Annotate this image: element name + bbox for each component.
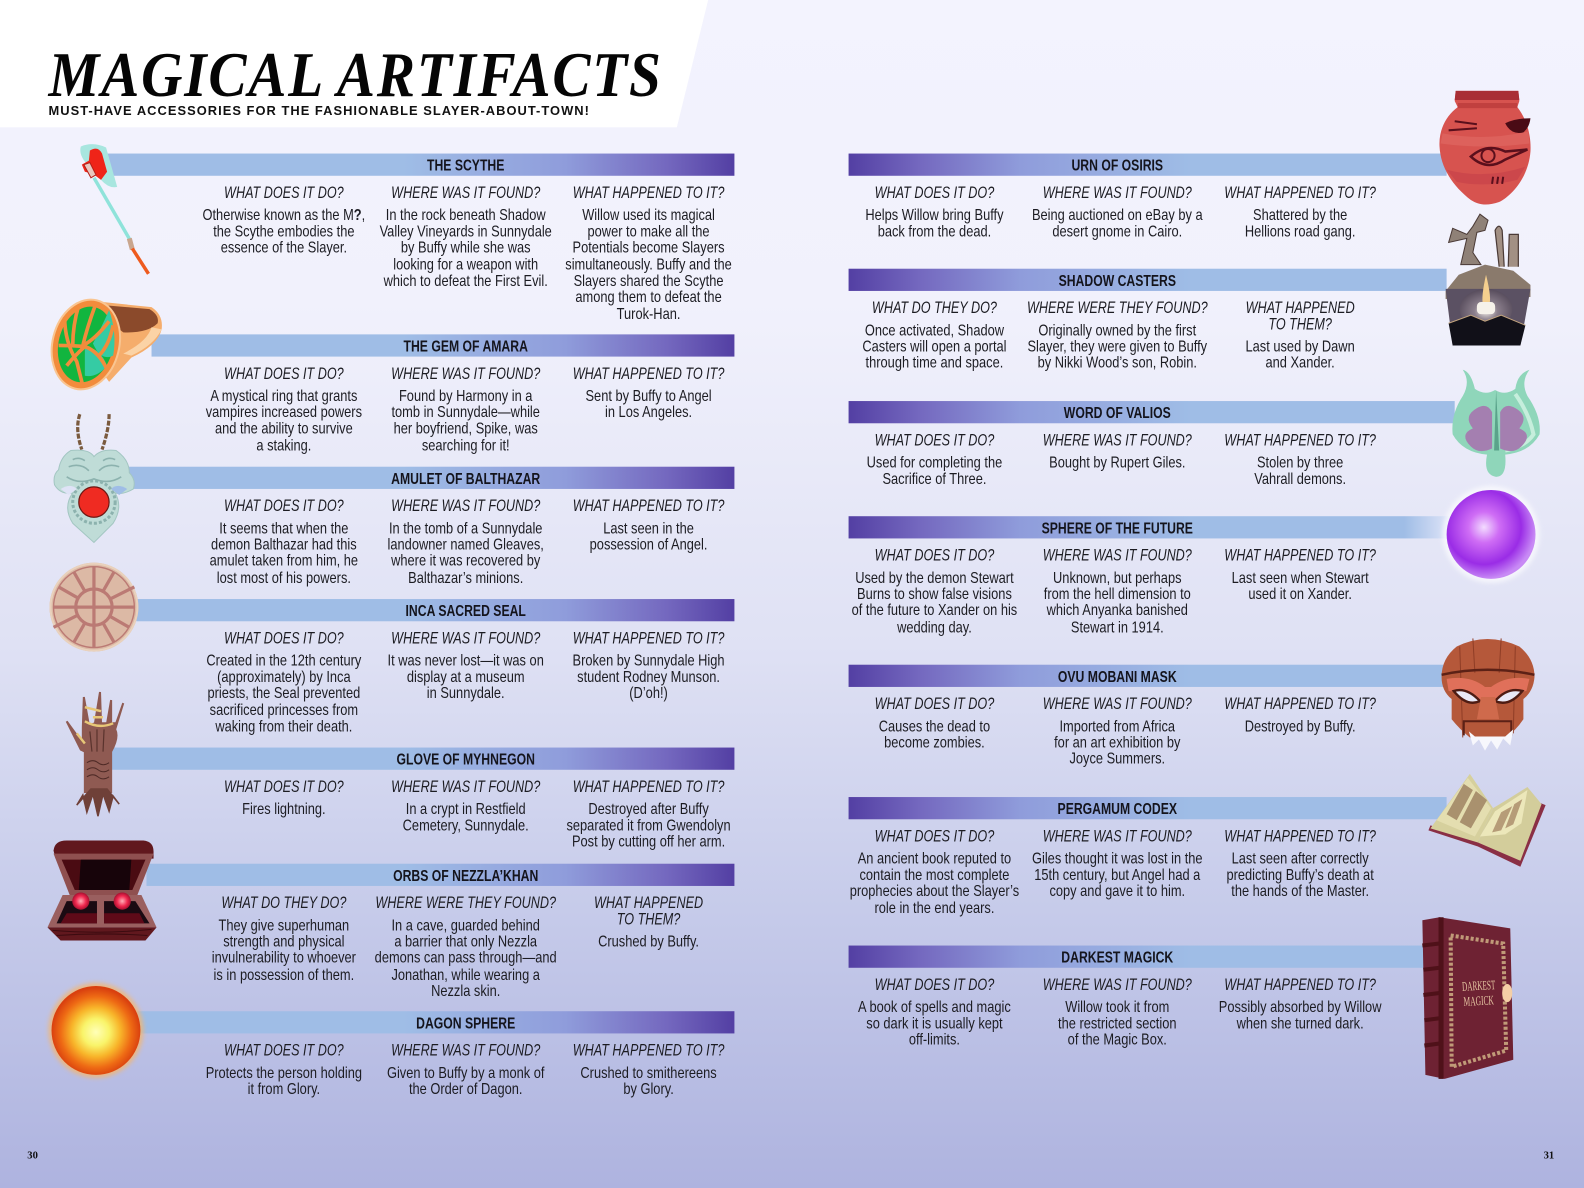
column: what does it do: priests, the Seal prevented — [207, 685, 360, 702]
column: what happened: Last used by Dawn — [1246, 339, 1355, 356]
panel: the gem of amara — [152, 334, 734, 454]
icon: dagon sphere — [48, 983, 143, 1078]
column: what happened: predicting Buffy’s death at — [1226, 867, 1374, 884]
panel: ovu mobani mask — [838, 665, 1455, 771]
column: what happened: Destroyed by Buffy. — [1245, 718, 1356, 735]
panel: inca sacred seal — [136, 599, 734, 735]
column: what happened: by Glory. — [623, 1081, 674, 1098]
icon: ovu mobani mask — [1442, 638, 1534, 751]
column: where found: her boyfriend, Spike, was — [394, 421, 538, 438]
icon: scythe — [80, 144, 148, 274]
panel: urn of osiris — [848, 154, 1447, 241]
column: where found — [1014, 976, 1221, 1049]
column: where found: It was never lost—it was on — [388, 652, 544, 670]
column: what happened: the hands of the Master. — [1231, 883, 1369, 900]
column: what happened: WHAT HAPPENED — [594, 894, 703, 912]
column: where found — [380, 183, 552, 290]
band: dagon — [136, 1011, 734, 1033]
column: where found: copy and gave it to him. — [1049, 883, 1185, 900]
column: where found: Cemetery, Sunnydale. — [403, 817, 529, 835]
icon: shadow casters — [1446, 214, 1530, 345]
column: where found: WHERE WAS IT FOUND? — [391, 183, 540, 202]
column: what happened: WHAT HAPPENED TO IT? — [1224, 546, 1376, 564]
column: what does it do: An ancient book reputed to — [858, 850, 1011, 868]
column: where found: WHERE WAS IT FOUND? — [391, 364, 540, 382]
column: where found: Unknown, but perhaps — [1053, 570, 1182, 587]
column: what does it do: amulet taken from him, he — [210, 553, 358, 570]
column: what does it do: WHAT DOES IT DO? — [224, 777, 344, 796]
icon: darkest magick book — [1422, 917, 1513, 1079]
column: what do they do — [212, 894, 356, 984]
column: where found: Found by Harmony in a — [399, 388, 532, 405]
column: where found: WHERE WERE THEY FOUND? — [1027, 299, 1208, 317]
band: mask — [849, 665, 1447, 687]
column: where found: which Anyanka banished — [1047, 602, 1188, 620]
band: urn — [849, 154, 1447, 176]
column: what happened: separated it from Gwendolyn — [566, 817, 731, 835]
band: gem of amara — [152, 334, 734, 357]
band: shadow casters — [849, 269, 1447, 291]
column: what happened: Shattered by the — [1253, 207, 1347, 224]
column: what does it do: of the future to Xander on his — [852, 602, 1017, 620]
column: what happened: Possibly absorbed by Willow — [1219, 999, 1381, 1016]
band: glove — [106, 748, 734, 770]
column: where found: searching for it! — [422, 437, 510, 454]
column: what does it do: off-limits. — [909, 1032, 960, 1049]
title banner — [0, 0, 708, 127]
column: what does it do: Sacrifice of Three. — [882, 471, 986, 488]
column: where found — [1014, 696, 1221, 768]
column: what happened — [1197, 976, 1404, 1033]
column: what does it do: WHAT DOES IT DO? — [875, 431, 994, 449]
column: what does it do — [831, 976, 1038, 1049]
column: what does it do: demon Balthazar had this — [211, 537, 357, 554]
icon: sphere of the future — [1443, 486, 1540, 583]
band: valios — [849, 401, 1455, 423]
heading: ORBS OF NEZZLA’KHAN — [393, 867, 538, 884]
column: what happened: WHAT HAPPENED TO IT? — [573, 777, 724, 796]
column: where found: In a cave, guarded behind — [391, 917, 540, 934]
column: what does it do: WHAT DOES IT DO? — [224, 629, 344, 647]
page number: 30: 30 — [27, 1151, 38, 1162]
column: where found: Imported from Africa — [1059, 718, 1175, 735]
column: what happened: Willow used its magical — [582, 207, 715, 224]
panel: orbs of nezzla'khan — [146, 864, 734, 1000]
column: what do they do: invulnerability to whoever — [212, 950, 356, 967]
column: what does it do — [206, 364, 362, 454]
column: where found: from the hell dimension to — [1044, 586, 1191, 603]
column: what does it do: Protects the person holding — [206, 1065, 362, 1082]
column: what happened: WHAT HAPPENED — [1246, 299, 1355, 317]
column: where found: In a crypt in Restfield — [406, 801, 526, 818]
column: where found — [387, 1041, 544, 1098]
column: what does it do: so dark it is usually kept — [866, 1015, 1003, 1033]
band: sphere — [849, 516, 1450, 538]
column: what does it do: A book of spells and magic — [858, 999, 1011, 1016]
panel: darkest magick — [838, 946, 1455, 1052]
column: where found: WHERE WAS IT FOUND? — [1043, 695, 1192, 713]
column: what happened — [565, 183, 732, 323]
column: what does it do: Created in the 12th century — [206, 652, 361, 670]
heading: GLOVE OF MYHNEGON — [396, 751, 535, 768]
column: what does it do — [224, 777, 344, 818]
column: what happened: TO THEM? — [617, 910, 680, 928]
heading: SHADOW CASTERS — [1059, 272, 1176, 289]
column: what happened: Slayers shared the Scythe — [574, 273, 723, 290]
column: what does it do: Helps Willow bring Buffy — [865, 207, 1004, 224]
column: what happened — [1224, 183, 1376, 241]
column: what does it do: the Scythe embodies the — [213, 223, 355, 241]
column: what happened — [566, 777, 731, 851]
icon: darkest magick book: DARKEST — [1462, 977, 1496, 994]
column: where found: tomb in Sunnydale—while — [391, 404, 540, 421]
column: what happened: WHAT HAPPENED TO IT? — [1224, 183, 1376, 202]
column: what does it do: a staking. — [256, 437, 311, 454]
column: where found — [388, 497, 544, 587]
heading: INCA SACRED SEAL — [406, 603, 526, 620]
column: what happened: Potentials become Slayers — [573, 240, 725, 257]
panel: shadow casters — [848, 268, 1447, 372]
column: what happened: WHAT HAPPENED TO IT? — [573, 1041, 724, 1059]
column: where found: display at a museum — [407, 669, 525, 686]
column: what does it do: WHAT DOES IT DO? — [224, 1041, 344, 1059]
band: the scythe — [101, 154, 734, 176]
column: what happened: Stolen by three — [1257, 454, 1343, 472]
column: where found: the Order of Dagon. — [409, 1081, 522, 1098]
band: seal — [136, 599, 734, 621]
band: orbs — [146, 864, 734, 886]
column: where found — [388, 629, 544, 702]
heading: THE SCYTHE — [427, 157, 504, 174]
heading: OVU MOBANI MASK — [1058, 668, 1177, 685]
column: where found — [375, 894, 557, 1000]
column: where found: WHERE WAS IT FOUND? — [1043, 827, 1192, 845]
heading: THE GEM OF AMARA — [404, 338, 528, 355]
panel: pergamum codex — [838, 797, 1455, 920]
column: what does it do: Causes the dead to — [879, 718, 990, 735]
icon: pergamum codex — [1428, 774, 1546, 867]
column: what does it do: WHAT DOES IT DO? — [224, 364, 344, 382]
column: what do they do: WHAT DO THEY DO? — [872, 299, 997, 317]
column: where found: WHERE WAS IT FOUND? — [1043, 183, 1192, 202]
column: what does it do: and the ability to survive — [215, 421, 353, 438]
column: where found: Jonathan, while wearing a — [391, 966, 540, 984]
column: what do they do: strength and physical — [223, 934, 345, 951]
column: where found: WHERE WAS IT FOUND? — [391, 1041, 540, 1059]
column: what does it do: it from Glory. — [248, 1081, 320, 1098]
band: codex — [849, 797, 1447, 819]
column: what do they do: WHAT DO THEY DO? — [221, 894, 346, 912]
page number: 31: 31 — [1544, 1151, 1554, 1162]
column: what does it do — [210, 497, 358, 587]
column: what does it do: WHAT DOES IT DO? — [875, 827, 994, 845]
column: what happened — [573, 497, 724, 554]
column: where found — [1027, 299, 1208, 372]
column: what does it do — [831, 696, 1038, 752]
column: where found: Valley Vineyards in Sunnydale — [380, 223, 552, 241]
column: what does it do: WHAT DOES IT DO? — [875, 695, 994, 713]
column: where found: Stewart in 1914. — [1071, 619, 1164, 636]
column: where found — [1014, 828, 1221, 901]
column: what happened: when she turned dark. — [1237, 1015, 1364, 1033]
column: what happened: possession of Angel. — [590, 537, 707, 554]
panel: sphere of the future — [838, 516, 1455, 639]
column: where found: WHERE WAS IT FOUND? — [1043, 546, 1192, 564]
column: what happened — [1197, 696, 1404, 736]
column: where found: which to defeat the First Evil. — [384, 273, 548, 290]
subtitle: MUST-HAVE ACCESSORIES FOR THE FASHIONABLE SLAYER-ABOUT-TOWN! — [48, 104, 590, 118]
column: what does it do: Otherwise known as the M?, — [203, 207, 365, 224]
column: what does it do: prophecies about the Slayer’s — [850, 883, 1019, 900]
column: what does it do: WHAT DOES IT DO? — [224, 183, 344, 202]
heading: DAGON SPHERE — [416, 1015, 515, 1032]
column: what does it do: Burns to show false visions — [857, 586, 1012, 603]
column: what happened: WHAT HAPPENED TO IT? — [573, 364, 724, 382]
column: where found: Given to Buffy by a monk of — [387, 1065, 544, 1082]
column: what does it do: contain the most complete — [859, 867, 1009, 884]
heading: PERGAMUM CODEX — [1058, 801, 1177, 818]
column: what happened — [1246, 299, 1355, 372]
column: what does it do: lost most of his powers. — [217, 569, 351, 587]
column: where found: of the Magic Box. — [1068, 1032, 1167, 1049]
column: what happened: WHAT HAPPENED TO IT? — [1224, 827, 1376, 845]
column: where found: Originally owned by the first — [1038, 322, 1196, 339]
column: what does it do: Used for completing the — [867, 454, 1002, 472]
column: what happened: Last seen after correctly — [1232, 850, 1369, 868]
column: what happened: used it on Xander. — [1248, 586, 1352, 603]
column: where found: in Sunnydale. — [427, 685, 505, 702]
column: what happened — [594, 894, 703, 951]
column: what does it do: (approximately) by Inca — [217, 669, 351, 686]
column: what happened: Hellions road gang. — [1245, 223, 1355, 241]
column: what happened: Last seen when Stewart — [1232, 570, 1369, 587]
column: where found: a barrier that only Nezzla — [394, 934, 537, 951]
column: where found — [391, 777, 540, 835]
column: what does it do: become zombies. — [884, 735, 985, 752]
column: what happened: Vahrall demons. — [1254, 471, 1346, 488]
column: where found: WHERE WAS IT FOUND? — [1043, 975, 1192, 994]
column: what happened — [1197, 432, 1404, 488]
icon: gem of amara ring — [43, 292, 162, 397]
column: what does it do: wedding day. — [897, 619, 972, 636]
column: where found — [1014, 547, 1221, 636]
column: where found — [1032, 183, 1203, 241]
column: where found: WHERE WERE THEY FOUND? — [375, 894, 556, 912]
column: what happened: Turok-Han. — [617, 306, 680, 323]
column: where found: by Buffy while she was — [401, 240, 531, 257]
column: where found: Willow took it from — [1065, 999, 1169, 1016]
icon: urn of osiris — [1439, 91, 1531, 205]
column: where found: looking for a weapon with — [393, 256, 538, 273]
column: what does it do: WHAT DOES IT DO? — [875, 546, 994, 564]
heading: DARKEST MAGICK — [1061, 949, 1173, 966]
column: where found: WHERE WAS IT FOUND? — [391, 497, 540, 515]
icon: inca sacred seal — [49, 563, 138, 652]
column: what happened — [1197, 547, 1404, 603]
column: what happened: WHAT HAPPENED TO IT? — [573, 497, 724, 515]
column: where found: demons can pass through—and — [375, 950, 557, 967]
column: what does it do: WHAT DOES IT DO? — [875, 975, 994, 994]
column: what do they do: Once activated, Shadow — [865, 322, 1004, 339]
column: what happened: WHAT HAPPENED TO IT? — [1224, 695, 1376, 713]
column: what do they do: through time and space. — [866, 355, 1003, 372]
column: where found: desert gnome in Cairo. — [1052, 223, 1182, 241]
column: what happened: Crushed to smithereens — [580, 1065, 717, 1082]
column: where found: Slayer, they were given to Buffy — [1027, 339, 1207, 356]
column: what does it do: sacrificed princesses from — [210, 702, 358, 719]
icon: darkest magick book: MAGICK — [1463, 992, 1495, 1009]
column: what happened: student Rodney Munson. — [577, 669, 720, 686]
column: what does it do: role in the end years. — [874, 900, 994, 917]
heading: AMULET OF BALTHAZAR — [391, 470, 540, 487]
column: what does it do — [206, 1041, 362, 1098]
column: where found: Balthazar’s minions. — [408, 569, 523, 587]
column: what do they do: They give superhuman — [219, 917, 349, 934]
panel: dagon sphere — [136, 1011, 734, 1098]
panel: the scythe — [108, 154, 734, 323]
title: MAGICAL ARTIFACTS — [48, 39, 663, 110]
column: where found: WHERE WAS IT FOUND? — [391, 777, 540, 796]
column: where found — [391, 364, 540, 454]
column: where found: Giles thought it was lost in the — [1032, 850, 1203, 868]
column: what does it do: vampires increased powers — [206, 404, 362, 421]
column: what happened: Broken by Sunnydale High — [573, 652, 725, 670]
band: darkest magick — [849, 946, 1426, 968]
icon: orbs of nezzla'khan chest — [47, 840, 157, 940]
column: what happened: and Xander. — [1265, 355, 1335, 372]
column: what does it do — [203, 183, 365, 257]
panel: glove of myhnegon — [112, 748, 734, 851]
column: where found — [1043, 431, 1192, 472]
column: what happened — [573, 1041, 724, 1098]
column: what does it do: WHAT DOES IT DO? — [875, 183, 994, 202]
column: what does it do: Used by the demon Stewart — [855, 570, 1014, 587]
column: what does it do: It seems that when the — [219, 520, 348, 537]
column: what happened: (D’oh!) — [629, 685, 668, 702]
icon: word of valios — [1452, 370, 1540, 477]
column: where found: Joyce Summers. — [1069, 751, 1165, 768]
column: where found: WHERE WAS IT FOUND? — [1043, 431, 1192, 449]
panel: word of valios — [848, 401, 1455, 488]
column: where found: WHERE WAS IT FOUND? — [391, 629, 540, 647]
column: what happened: Post by cutting off her arm. — [572, 834, 725, 851]
column: where found: Nezzla skin. — [431, 983, 500, 1000]
column: where found: where it was recovered by — [391, 553, 540, 570]
heading: URN OF OSIRIS — [1071, 157, 1163, 174]
heading: WORD OF VALIOS — [1064, 405, 1171, 422]
heading: SPHERE OF THE FUTURE — [1042, 520, 1193, 537]
column: what does it do: essence of the Slayer. — [221, 240, 347, 257]
column: where found: landowner named Gleaves, — [388, 537, 544, 554]
column: what does it do — [865, 183, 1004, 241]
column: what do they do: Casters will open a portal — [862, 339, 1007, 356]
column: what happened: Last seen in the — [603, 520, 694, 537]
icon: glove of myhnegon — [67, 692, 123, 816]
column: what happened: simultaneously. Buffy and the — [565, 256, 732, 273]
column: what does it do: WHAT DOES IT DO? — [224, 497, 344, 515]
column: what happened: Sent by Buffy to Angel — [585, 388, 712, 405]
column: what does it do: Fires lightning. — [242, 801, 326, 818]
column: where found: Being auctioned on eBay by a — [1032, 207, 1203, 224]
column: what happened: Crushed by Buffy. — [598, 934, 699, 951]
column: what do they do: is in possession of them. — [214, 966, 354, 984]
column: what does it do — [867, 431, 1002, 488]
column: what happened: WHAT HAPPENED TO IT? — [573, 183, 724, 202]
column: what do they do — [862, 299, 1007, 372]
column: where found: the restricted section — [1058, 1015, 1177, 1033]
column: where found: Bought by Rupert Giles. — [1049, 454, 1185, 472]
column: what happened: in Los Angeles. — [605, 404, 692, 421]
column: what does it do: waking from their death. — [215, 718, 352, 735]
column: what happened: WHAT HAPPENED TO IT? — [1224, 431, 1376, 449]
panel: amulet of balthazar — [129, 466, 734, 587]
column: what does it do — [206, 629, 362, 735]
band: amulet — [126, 467, 734, 489]
column: what happened — [1197, 828, 1404, 901]
column: what happened: WHAT HAPPENED TO IT? — [1224, 975, 1376, 994]
column: where found: for an art exhibition by — [1054, 735, 1180, 752]
column: where found: In the rock beneath Shadow — [386, 207, 546, 224]
column: what does it do — [831, 547, 1038, 636]
column: what happened — [573, 629, 725, 702]
column: what happened: power to make all the — [588, 223, 710, 241]
column: where found: 15th century, but Angel had a — [1034, 867, 1200, 884]
column: what does it do: back from the dead. — [878, 223, 991, 241]
column: what happened: TO THEM? — [1268, 315, 1332, 333]
column: what happened: Destroyed after Buffy — [588, 801, 709, 818]
column: what happened: WHAT HAPPENED TO IT? — [573, 629, 724, 647]
column: what does it do — [831, 828, 1038, 917]
column: where found: by Nikki Wood’s son, Robin. — [1038, 355, 1197, 372]
icon: amulet of balthazar — [54, 414, 134, 542]
column: what happened: among them to defeat the — [575, 289, 722, 306]
column: where found: In the tomb of a Sunnydale — [389, 520, 542, 537]
column: what does it do: A mystical ring that grants — [210, 388, 357, 405]
column: what happened — [573, 364, 724, 421]
